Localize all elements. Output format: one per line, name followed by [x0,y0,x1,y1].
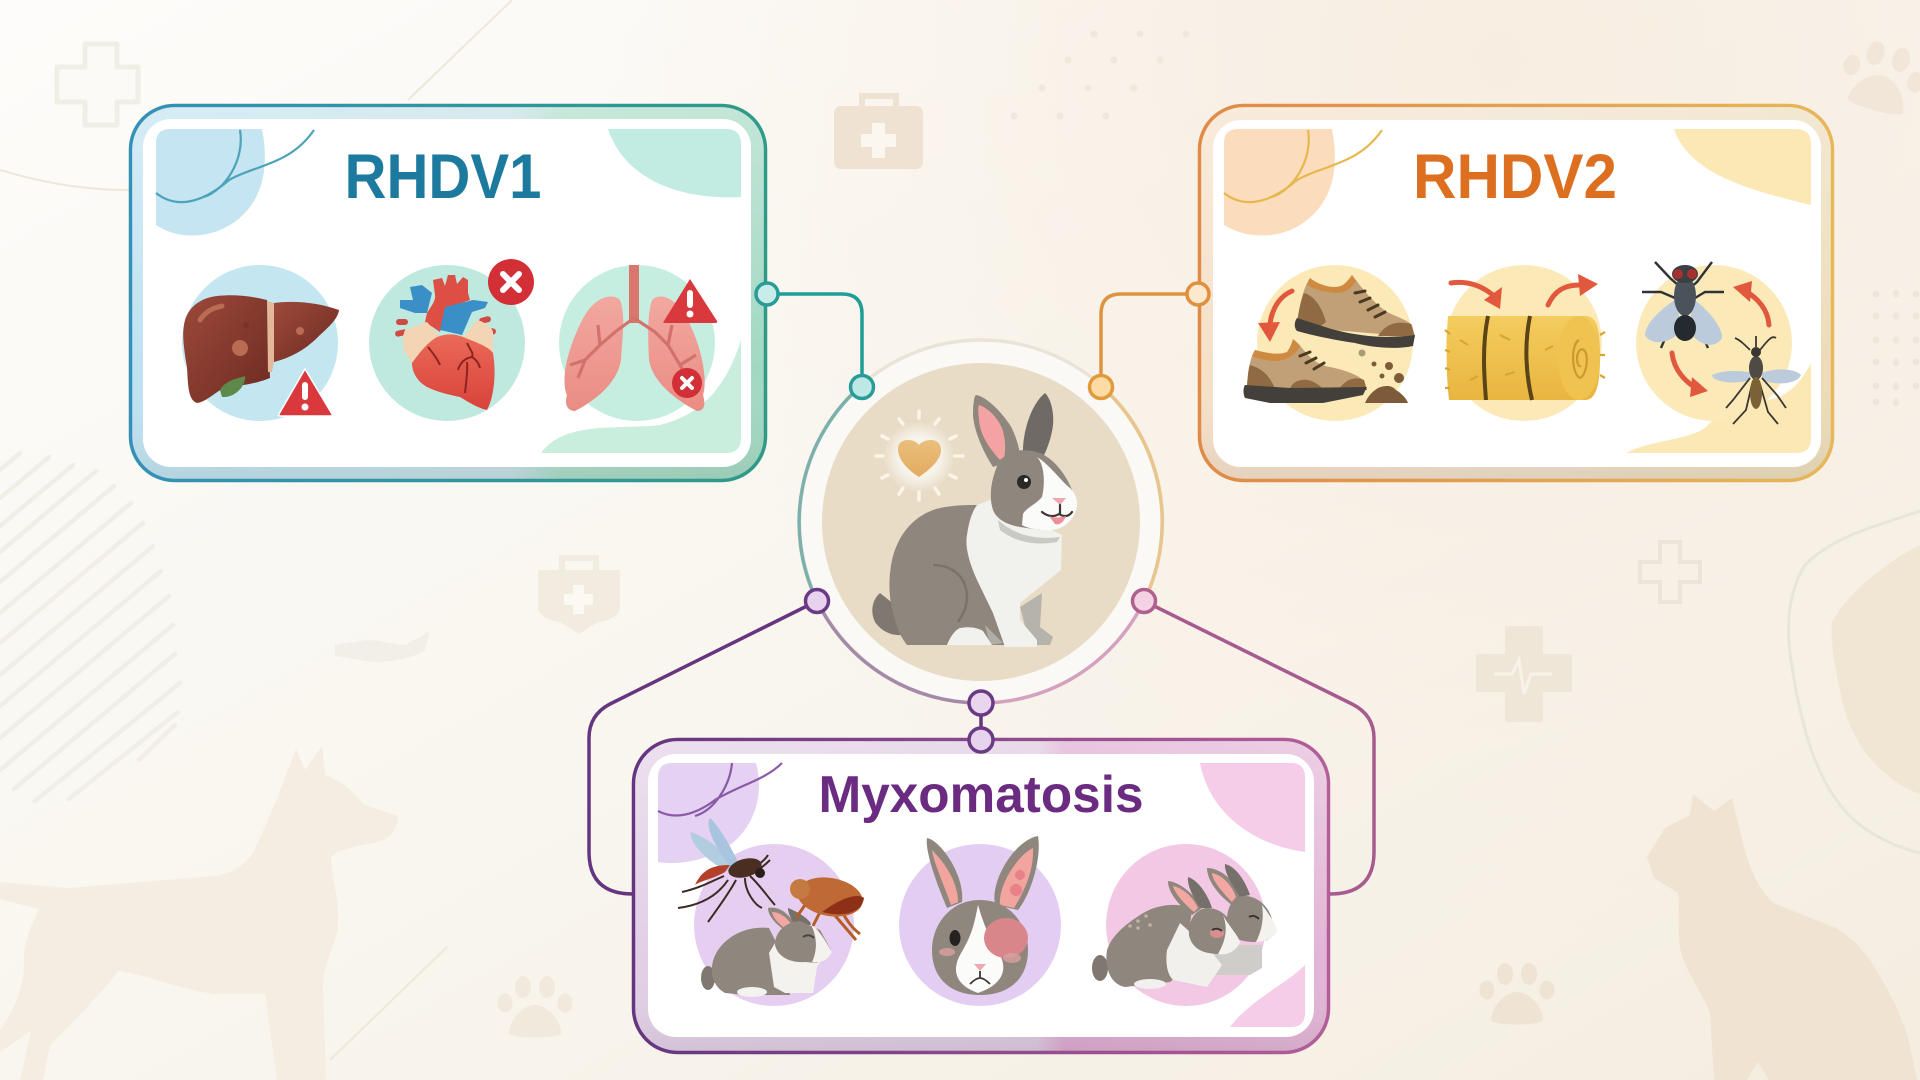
medical kit shield [538,558,620,634]
dot pattern top [1010,30,1190,120]
icon: sick rabbits [1092,844,1277,1006]
x badge [672,368,702,398]
connector: left Myxomatosis to rabbit [589,601,817,894]
title: RHDV2 [1413,142,1617,212]
panel: RHDV1 [130,106,778,480]
x badge [488,259,534,305]
card [1213,120,1821,467]
panel: RHDV2 [1187,106,1832,480]
tan disc [822,363,1140,681]
title: Myxomatosis [818,766,1144,824]
diagonal stripes decoration [0,453,180,801]
dog silhouette [0,746,398,1080]
outer ring [799,340,1162,703]
icon: hay bale [1445,265,1605,421]
card [143,119,751,467]
connector: RHDV2 to rabbit [1101,294,1198,387]
connector: RHDV1 to rabbit [767,294,862,387]
vessels [395,275,496,337]
medical cross outline right [1640,542,1700,602]
connector: right Myxomatosis to rabbit [1144,601,1374,894]
corner blobs [1224,129,1811,453]
corner blobs [156,129,741,453]
node: pink [1132,590,1156,612]
front rabbit [1092,877,1240,989]
upper boot [1295,275,1415,348]
flea [790,873,866,940]
node [1187,283,1209,305]
icon: heart [369,259,534,421]
thin decorative lines [0,0,512,1060]
title: RHDV1 [344,142,542,212]
cycle arrows [1672,281,1769,397]
medical cross with pulse [1478,628,1570,720]
node [756,283,778,305]
icon: liver [182,265,339,421]
mosquito [678,818,775,922]
dot pattern right [1872,290,1920,406]
right blob [1832,545,1920,794]
icon: fly and mosquito [1636,262,1801,424]
rabbit [872,393,1077,647]
centre rabbit medallion [799,340,1162,703]
medical cross outline top-left [57,44,138,125]
connector: centre to Myxomatosis [979,703,983,740]
paw prints [498,34,1920,1037]
medical kit top [834,96,923,169]
mosquito [1712,336,1801,424]
back rabbit [1205,864,1277,975]
corner blobs [658,763,1305,1027]
cat silhouette [1647,794,1917,1080]
warning triangle [663,279,717,323]
lower boot [1244,339,1367,403]
node: top of panel [969,728,993,752]
panel: Myxomatosis [634,728,1328,1052]
soil [1358,350,1408,403]
node: teal [850,376,874,398]
icon: swollen-eye rabbit face [899,836,1061,1006]
frame [130,106,766,480]
node: orange [1090,376,1112,398]
warning triangle [279,369,332,416]
icon: muddy boots [1244,265,1415,421]
small rabbit [701,908,832,997]
icon: mosquito, flea and rabbit [678,818,866,1006]
arrow [1258,291,1292,342]
collar decoration [335,630,430,662]
node: purple [806,590,828,612]
frame [1200,106,1832,480]
frame [634,740,1328,1052]
heart with glow [876,411,963,500]
icon: lungs [559,265,717,421]
node: bottom [969,691,993,715]
fly [1642,262,1724,348]
card [648,754,1314,1037]
